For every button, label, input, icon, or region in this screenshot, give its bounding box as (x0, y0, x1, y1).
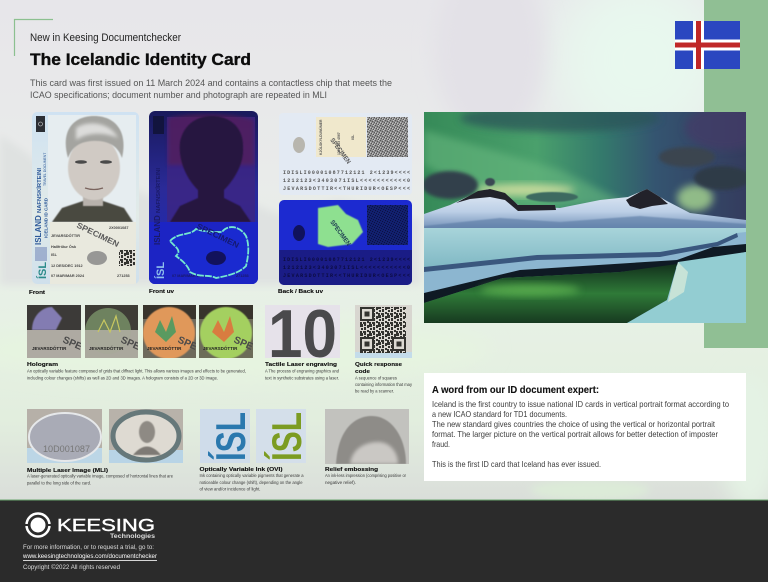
ID card back under UV: SPECIMEN (328, 219, 352, 248)
tactile caption: text in synthetic substrates using a laser. (265, 376, 339, 382)
expert body text: a new ICAO standard for TD1 documents. (432, 409, 567, 419)
relief caption: Relief embossing (325, 467, 379, 473)
ID card front: NAFNSKÍRTEINI (35, 167, 43, 213)
ID card front: 12 DES/DEC 1912 (51, 264, 83, 268)
MLI caption: parallel to the long side of the card. (27, 480, 91, 486)
green side block (704, 0, 768, 348)
MLI image: document number (27, 409, 102, 463)
expert body text: This is the first ID card that Iceland has ever issued. (432, 459, 601, 469)
landscape photo (422, 104, 765, 323)
intro text: This card was first issued on 11 March 2024 and contains a contactless chip that meets the (30, 78, 392, 88)
QR caption: A sequence of squares (355, 376, 398, 382)
OVI image: blue: ÍSL (207, 412, 254, 461)
ID card front under UV: NAFNSKÍRTEINI (154, 167, 162, 213)
ID card back: ISL (351, 135, 355, 140)
QR caption (355, 362, 413, 394)
Keesing logo: KEESING (57, 515, 155, 535)
hologram caption: Hologram (27, 362, 58, 368)
ID card back: KJÖLSKYLDUNÚMER (318, 119, 323, 155)
hologram tile 3 (143, 305, 199, 359)
OVI caption: of view and/or incidence of light. (200, 486, 260, 492)
QR code image (355, 305, 412, 358)
relief embossing image (325, 409, 409, 464)
ID card back: 1212 123 4567 (337, 132, 341, 155)
footer (0, 500, 768, 582)
hologram tile 2: JEVARSDÓTTIR (89, 344, 124, 351)
OVI caption: noticeable colour change (shift), depending on the angle (200, 480, 303, 486)
ID card front under UV: 07 MAR/MAR 2024 (172, 274, 206, 278)
expert panel (424, 373, 746, 481)
footer contact text (22, 544, 158, 571)
caption: back: Back / Back uv (278, 289, 323, 295)
tactile caption: A The process of engraving graphics and (265, 368, 339, 374)
ID card front: ISLAND (34, 215, 43, 245)
ID card back under UV: JEVARSDOTTIR<<THURIDUR<OESP<<< (283, 273, 410, 279)
hologram tile 2: SPE (119, 335, 142, 353)
MLI image: document number: 10D001087 (43, 444, 90, 454)
ID card back under UV: IDISLI00001087712121 2<1239<<<< (283, 257, 410, 263)
ID card front: 2X0001087 (109, 226, 128, 230)
ID card front: SPECIMEN (75, 221, 121, 249)
intro text: ICAO specifications; document number and photograph are repeated in MLI (30, 90, 327, 100)
ID card front under UV: ÍSL (154, 262, 167, 279)
ID card front: ÍSL (36, 262, 49, 279)
hologram tile 3: SPE (176, 335, 199, 353)
header corner bracket (14, 20, 53, 56)
flag of Iceland (675, 21, 740, 69)
ID card front under UV: SPECIMEN (195, 222, 241, 250)
hologram tile 1: JEVARSDÓTTIR (32, 344, 67, 351)
hologram tile 1 (27, 305, 84, 358)
ID card front: TRAVEL DOCUMENT (43, 153, 47, 186)
ID card back under UV (279, 200, 412, 285)
ID card front (32, 112, 139, 284)
footer contact text: For more information, or to request a trial, go to: (23, 544, 154, 551)
expert body text (432, 399, 729, 469)
hologram caption: including colour changes (shifts) as well as 2D and 3D images. A hologram consists of a 2D or 3D image. (27, 376, 218, 382)
Keesing logo (24, 514, 156, 540)
ID card front under UV (149, 111, 258, 284)
relief caption: negative relief). (325, 480, 356, 486)
eyebrow heading: New in Keesing Documentchecker (30, 32, 181, 44)
hologram tile 4: SPE (232, 335, 255, 353)
expert body text: The new standard gives countries the choice of using the vertical or horizontal portrait (432, 419, 716, 429)
OVI caption (200, 467, 304, 492)
caption: front uv: Front uv (149, 289, 174, 295)
ID card front: ICELAND ID CARD (44, 197, 48, 238)
OVI image: blue (200, 409, 254, 463)
QR caption: containing information that may (355, 382, 413, 388)
caption: front: Front (29, 290, 45, 296)
hologram caption (27, 362, 246, 382)
ID card front: 271253 (117, 274, 130, 278)
ID card back: SPECIMEN (328, 137, 352, 166)
MLI caption: A laser-generated optically variable image, composed of horizontal lines that are (27, 474, 173, 480)
hologram tile 3: JEVARSDÓTTIR (147, 344, 182, 351)
ID card front: JEVARSDÓTTIR (51, 233, 80, 238)
hologram tile 1: SPE (61, 335, 84, 353)
ID card back: IDISLI00001087712121 2<1239<<<< (283, 170, 410, 176)
expert body text: Iceland is the first country to issue national ID cards in vertical portrait format according to (432, 399, 729, 409)
hologram tile 2 (85, 305, 142, 358)
ID card back under UV: 1212123<3403071ISL<<<<<<<<<<<0 (283, 265, 410, 271)
MLI caption (27, 468, 173, 486)
title: The Icelandic Identity Card (30, 51, 251, 69)
OVI image: green: ÍSL (263, 412, 310, 461)
QR caption: be read by a scanner. (355, 388, 394, 394)
OVI caption: Optically Variable Ink (OVI) (200, 467, 283, 473)
ID card back (279, 113, 412, 195)
ID card front under UV: ISLAND (153, 215, 162, 245)
footer contact text: www.keesingtechnologies.com/documentchecker (22, 553, 158, 560)
tactile laser engraving image: 10 (268, 296, 337, 372)
hologram tile 4: JEVARSDÓTTIR (203, 344, 238, 351)
intro text (30, 78, 392, 100)
hologram tile 4 (199, 305, 255, 359)
hologram caption: An optically variable feature composed of grids that diffract light. This allows various images and effects to be generated, (27, 368, 246, 374)
expert body text: fraud. (432, 439, 450, 449)
MLI caption: Multiple Laser Image (MLI) (27, 468, 108, 474)
OVI caption: Ink containing optically variable pigments that generate a (200, 473, 304, 479)
ID card back: JEVARSDOTTIR<<THURIDUR<OESP<<< (283, 186, 410, 192)
ID card back: 1212123<3403071ISL<<<<<<<<<<<0 (283, 178, 410, 184)
relief caption (325, 467, 406, 486)
OVI image: green (256, 409, 310, 463)
MLI image: portrait (109, 409, 183, 463)
ID card front: 07 MAR/MAR 2024 (51, 274, 85, 278)
QR caption: code (355, 369, 371, 375)
tactile caption (265, 362, 339, 382)
expert heading: A word from our ID document expert: (432, 384, 599, 396)
Keesing logo: Technologies (110, 533, 156, 540)
ID card front: ISL (51, 253, 58, 257)
ID card front under UV: 271253 (236, 274, 249, 278)
relief caption: An ink-less impression (comprising positive or (325, 473, 406, 479)
QR caption: Quick response (355, 362, 403, 368)
expert body text: format. The larger picture on the vertical portrait allows for better detection of imposter (432, 429, 718, 439)
footer contact text: Copyright ©2022 All rights reserved (23, 563, 120, 571)
ID card front: Hallfríður Ósk (51, 244, 77, 249)
tactile caption: Tactile Laser engraving (265, 362, 338, 368)
